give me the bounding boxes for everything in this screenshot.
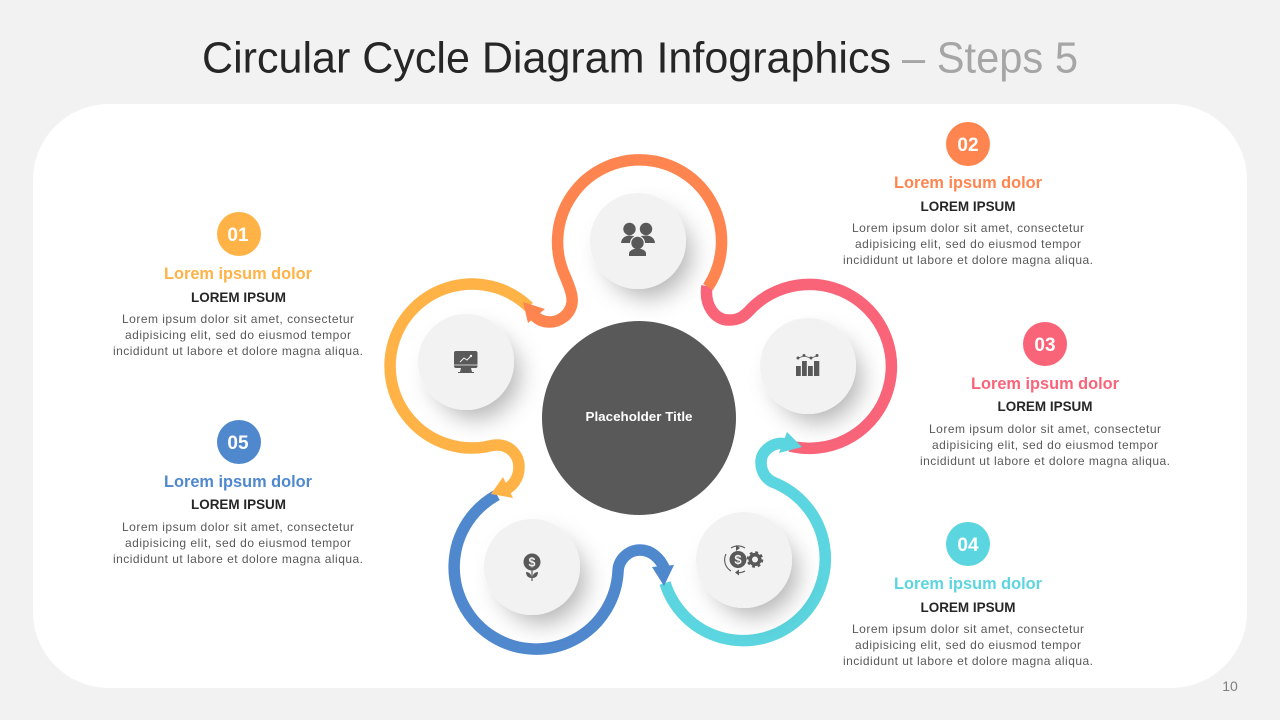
badge 05 (217, 420, 261, 464)
icon: dollar cycle and gear: $ (734, 552, 742, 567)
text block: step 1: LOREM IPSUM (191, 289, 286, 305)
text block: step 3: Lorem ipsum dolor (971, 374, 1119, 393)
text block: step 3 (920, 322, 1170, 468)
panel: white content card (33, 104, 1247, 688)
text block: step 4: adipisicing elit, sed do eiusmod tempor (855, 638, 1081, 652)
text block: step 4: Lorem ipsum dolor (894, 574, 1042, 593)
text block: step 5: Lorem ipsum dolor sit amet, consectetur (122, 520, 354, 534)
text block: step 5: Lorem ipsum dolor (164, 472, 312, 491)
text block: step 5: LOREM IPSUM (191, 496, 286, 512)
text block: step 2 (843, 122, 1093, 267)
arrow: step 5 blue ring (454, 495, 674, 649)
text block: step 5: adipisicing elit, sed do eiusmod tempor (125, 536, 351, 550)
center circle with placeholder title (542, 321, 736, 515)
text block: step 2: incididunt ut labore et dolore magna aliqua. (843, 253, 1093, 267)
arrow: step 4 teal ring (665, 432, 825, 641)
text block: step 3: adipisicing elit, sed do eiusmod tempor (932, 438, 1158, 452)
badge 03 (1023, 322, 1067, 366)
badge 01: 01 (227, 225, 249, 246)
badge 03: 03 (1034, 335, 1056, 356)
badge 04: 04 (957, 535, 979, 556)
center circle with placeholder title: Placeholder Title (586, 410, 693, 424)
icon: people group (621, 223, 655, 256)
text block: step 2: adipisicing elit, sed do eiusmod tempor (855, 237, 1081, 251)
text block: step 1: Lorem ipsum dolor (164, 264, 312, 283)
text block: step 3: LOREM IPSUM (998, 398, 1092, 414)
badge 02 (946, 122, 990, 166)
text block: step 5 (113, 420, 363, 566)
text block: step 4: Lorem ipsum dolor sit amet, consectetur (852, 622, 1084, 636)
text block: step 3: Lorem ipsum dolor sit amet, consectetur (929, 422, 1161, 436)
text block: step 3: incididunt ut labore et dolore magna aliqua. (920, 454, 1170, 468)
badge 04 (946, 522, 990, 566)
text block: step 1 (113, 212, 363, 358)
icon: monitor with chart (454, 351, 478, 373)
page number: 10 (1222, 678, 1238, 694)
title: – Steps 5 (902, 34, 1078, 82)
text block: step 4 (843, 522, 1093, 668)
arrow: step 1 yellow ring (390, 284, 529, 498)
badge 02: 02 (957, 135, 979, 156)
icon: bar chart with trend (796, 354, 819, 376)
badge 05: 05 (227, 433, 249, 454)
icon disc: step 5 money plant (484, 519, 580, 615)
icon disc: step 2 people (590, 193, 686, 289)
icon: coin plant: $ (529, 556, 536, 570)
icon disc: step 3 bar chart (760, 318, 856, 414)
badge 01 (217, 212, 261, 256)
text block: step 1: incididunt ut labore et dolore magna aliqua. (113, 344, 363, 358)
text block: step 2: LOREM IPSUM (920, 198, 1016, 214)
text block: step 2: Lorem ipsum dolor sit amet, consectetur (852, 221, 1084, 235)
text block: step 5: incididunt ut labore et dolore magna aliqua. (113, 552, 363, 566)
icon disc: step 1 monitor (418, 314, 514, 410)
icon disc: step 4 dollar and gear (696, 512, 792, 608)
text block: step 2: Lorem ipsum dolor (894, 173, 1042, 192)
text block: step 1: Lorem ipsum dolor sit amet, consectetur (122, 312, 354, 326)
text block: step 4: LOREM IPSUM (920, 599, 1016, 615)
text block: step 1: adipisicing elit, sed do eiusmod tempor (125, 328, 351, 342)
text block: step 4: incididunt ut labore et dolore magna aliqua. (843, 654, 1093, 668)
title: Circular Cycle Diagram Infographics (202, 34, 891, 82)
arrow: step 2 orange ring (523, 160, 722, 323)
arrow: step 3 pink ring (707, 284, 891, 448)
